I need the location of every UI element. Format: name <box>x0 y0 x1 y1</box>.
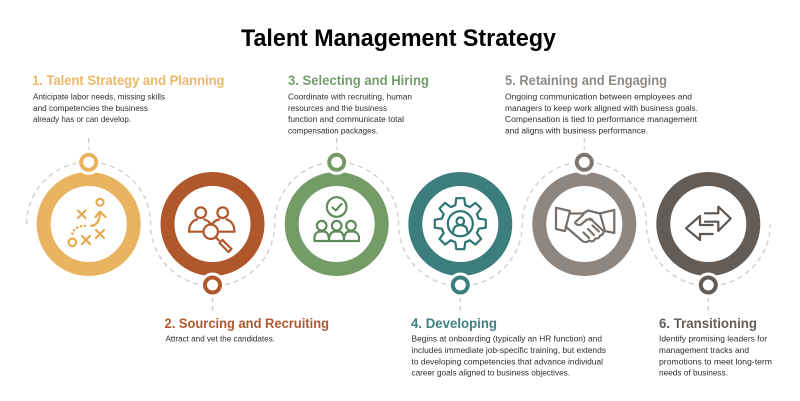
body: step 3: compensation packages. <box>288 125 378 135</box>
body: step 5: Ongoing communication between employees and <box>505 92 692 102</box>
body: step 2: Attract and vet the candidates. <box>166 334 275 344</box>
body: step 4: to developing competencies that advance individual <box>412 356 603 366</box>
step 2 text <box>164 316 329 344</box>
body: step 3: function and communicate total <box>288 114 404 124</box>
body: step 3: resources and the business <box>288 103 387 113</box>
body: step 5: Compensation is tied to performance management <box>505 114 698 124</box>
step 4 text <box>411 316 606 378</box>
icon: two-way arrows <box>686 207 731 240</box>
icon: people with magnifying glass <box>189 207 234 252</box>
step 3 ring <box>292 150 382 269</box>
body: step 4: includes immediate job-specific training, but extends <box>412 345 606 355</box>
icon: handshake <box>556 208 614 242</box>
body: step 1: and competencies the business <box>33 103 148 113</box>
body: step 3: Coordinate with recruiting, human <box>288 92 412 102</box>
title: Talent Management Strategy <box>241 25 556 52</box>
body: step 5: managers to keep work aligned with business goals. <box>505 103 698 113</box>
heading: step 6: 6. Transitioning <box>659 316 757 331</box>
body: step 5 <box>505 92 698 135</box>
body: step 4: Begins at onboarding (typically an HR function) and <box>412 334 602 344</box>
heading: step 5: 5. Retaining and Engaging <box>505 73 667 88</box>
body: step 1 <box>33 92 165 124</box>
body: step 4 <box>412 334 606 378</box>
step 4 ring <box>415 179 505 298</box>
step 5 text <box>505 73 698 135</box>
icon: gear with person <box>435 198 486 249</box>
body: step 6: management tracks and <box>659 345 749 355</box>
body: step 6: promotions to meet long-term <box>659 356 772 366</box>
body: step 6: needs of business. <box>659 368 728 378</box>
body: step 6 <box>659 334 772 378</box>
step 2 ring <box>168 179 258 298</box>
step 6 ring <box>663 179 753 298</box>
body: step 4: career goals aligned to business objectives. <box>412 368 570 378</box>
step 3 text <box>288 73 429 135</box>
heading: step 4: 4. Developing <box>411 316 497 331</box>
step 1 ring <box>44 150 134 269</box>
body: step 1: Anticipate labor needs, missing skills <box>33 92 165 102</box>
heading: step 1: 1. Talent Strategy and Planning <box>32 73 224 88</box>
icon: team with check mark <box>314 197 359 241</box>
step 5 ring <box>539 150 629 269</box>
body: step 3 <box>288 92 412 135</box>
heading: step 2: 2. Sourcing and Recruiting <box>164 316 329 331</box>
body: step 5: and aligns with business performance. <box>505 125 648 135</box>
heading: step 3: 3. Selecting and Hiring <box>288 73 429 88</box>
icon: strategy play diagram <box>68 199 106 246</box>
step 1 text <box>32 73 224 124</box>
step 6 text <box>659 316 772 378</box>
body: step 6: Identify promising leaders for <box>659 334 767 344</box>
body: step 1: already has or can develop. <box>33 114 131 124</box>
